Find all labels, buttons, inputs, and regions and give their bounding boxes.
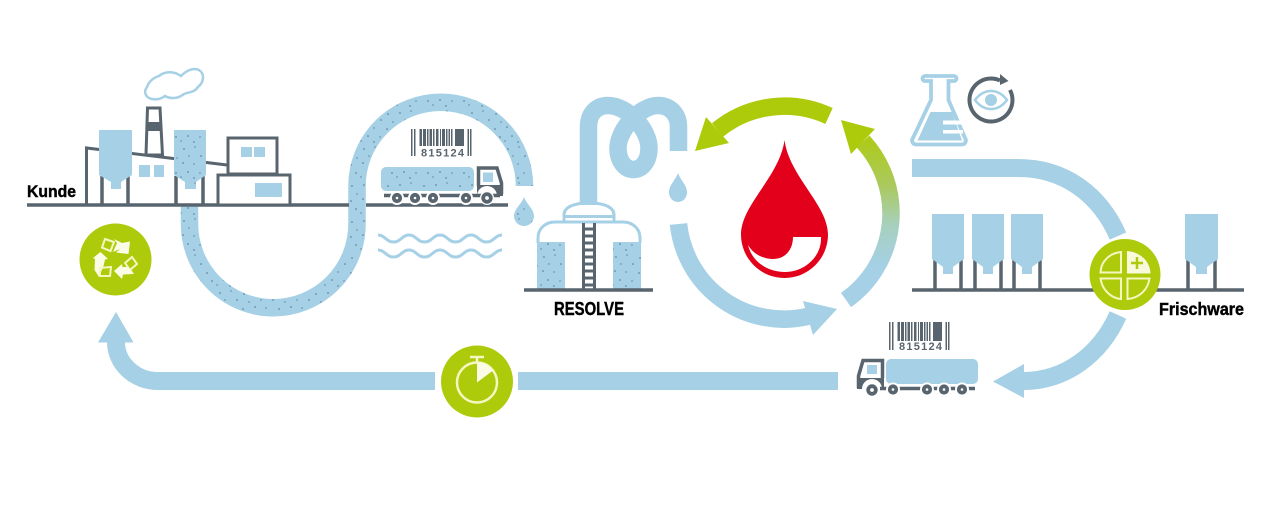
silo bodies bbox=[932, 214, 1218, 274]
lab flask bbox=[912, 76, 966, 144]
recycling badge bbox=[80, 224, 152, 296]
recycling top bbox=[102, 239, 130, 254]
tank outline bbox=[538, 203, 640, 243]
tank ground line bbox=[524, 288, 653, 292]
dotted silo bbox=[174, 130, 206, 189]
eye inspection icon bbox=[969, 74, 1012, 122]
lower building bbox=[218, 175, 290, 205]
eye bbox=[975, 91, 1007, 109]
customer label: Kunde bbox=[27, 182, 76, 201]
white crescent bbox=[748, 237, 821, 272]
quadrant bottom right bbox=[1128, 278, 1150, 299]
quadrant top left bbox=[1100, 252, 1121, 272]
blue drop bbox=[669, 173, 687, 202]
building windows bbox=[241, 147, 282, 197]
silo legs bbox=[102, 176, 203, 205]
chimney bbox=[146, 108, 162, 155]
cloud bbox=[145, 69, 203, 99]
timer badge bbox=[441, 346, 513, 418]
ground line: customer bbox=[27, 203, 508, 207]
silos: fresh product bbox=[932, 214, 1218, 290]
dotted tank bbox=[381, 167, 474, 191]
fresh product label: Frischware bbox=[1159, 299, 1244, 319]
tank fill right bbox=[613, 242, 641, 290]
wheel hubs bbox=[868, 386, 965, 394]
pipe from badge to truck bbox=[993, 315, 1118, 398]
wheels bbox=[391, 192, 493, 204]
tank bbox=[886, 359, 978, 384]
flask marks bbox=[943, 120, 963, 134]
ground line: fresh product bbox=[912, 288, 1244, 292]
dotted drop bbox=[514, 197, 534, 226]
recycling left bbox=[93, 252, 111, 277]
plus sign bbox=[1131, 257, 1143, 269]
barcode number: 815124 bbox=[899, 341, 943, 353]
plain tanker truck bbox=[857, 322, 978, 396]
dotted tanker truck bbox=[381, 129, 503, 204]
S-shaped dotted pipe bbox=[190, 102, 524, 308]
factory bbox=[86, 69, 290, 205]
wheels bbox=[866, 384, 968, 396]
ring arrow: green bbox=[695, 106, 829, 151]
bottom arrow to recycling bbox=[98, 312, 435, 381]
cab bbox=[478, 168, 502, 194]
tank fill left bbox=[537, 242, 565, 290]
silo legs bbox=[935, 258, 1215, 290]
ring arrow: blue bbox=[678, 224, 837, 335]
quadrant bottom left bbox=[1100, 278, 1121, 299]
ladder bbox=[583, 223, 595, 290]
factory hall outline bbox=[86, 148, 227, 205]
plain silo bbox=[99, 130, 132, 189]
chassis bbox=[384, 194, 500, 197]
quality badge bbox=[1090, 239, 1160, 310]
recycling right bbox=[114, 257, 137, 279]
water waves bbox=[378, 235, 502, 257]
cab bbox=[858, 360, 882, 388]
upper building bbox=[228, 138, 277, 174]
bottom arrow right segment bbox=[518, 372, 838, 390]
stopwatch wedge bbox=[477, 362, 493, 382]
factory windows bbox=[139, 165, 164, 177]
wheel hubs bbox=[394, 194, 491, 202]
RESOLVE tank bbox=[524, 203, 653, 290]
barcode number: 815124 bbox=[421, 148, 465, 160]
stopwatch bbox=[470, 357, 484, 362]
RESOLVE label: RESOLVE bbox=[554, 298, 624, 319]
quadrant top right bbox=[1127, 251, 1150, 274]
chassis bbox=[880, 387, 975, 390]
ring arrow: gradient bbox=[841, 120, 891, 300]
pipe from lab to badge bbox=[912, 168, 1118, 236]
looped pipe bbox=[588, 106, 678, 205]
red blood drop bbox=[741, 140, 828, 278]
flask liquid bbox=[918, 112, 962, 140]
